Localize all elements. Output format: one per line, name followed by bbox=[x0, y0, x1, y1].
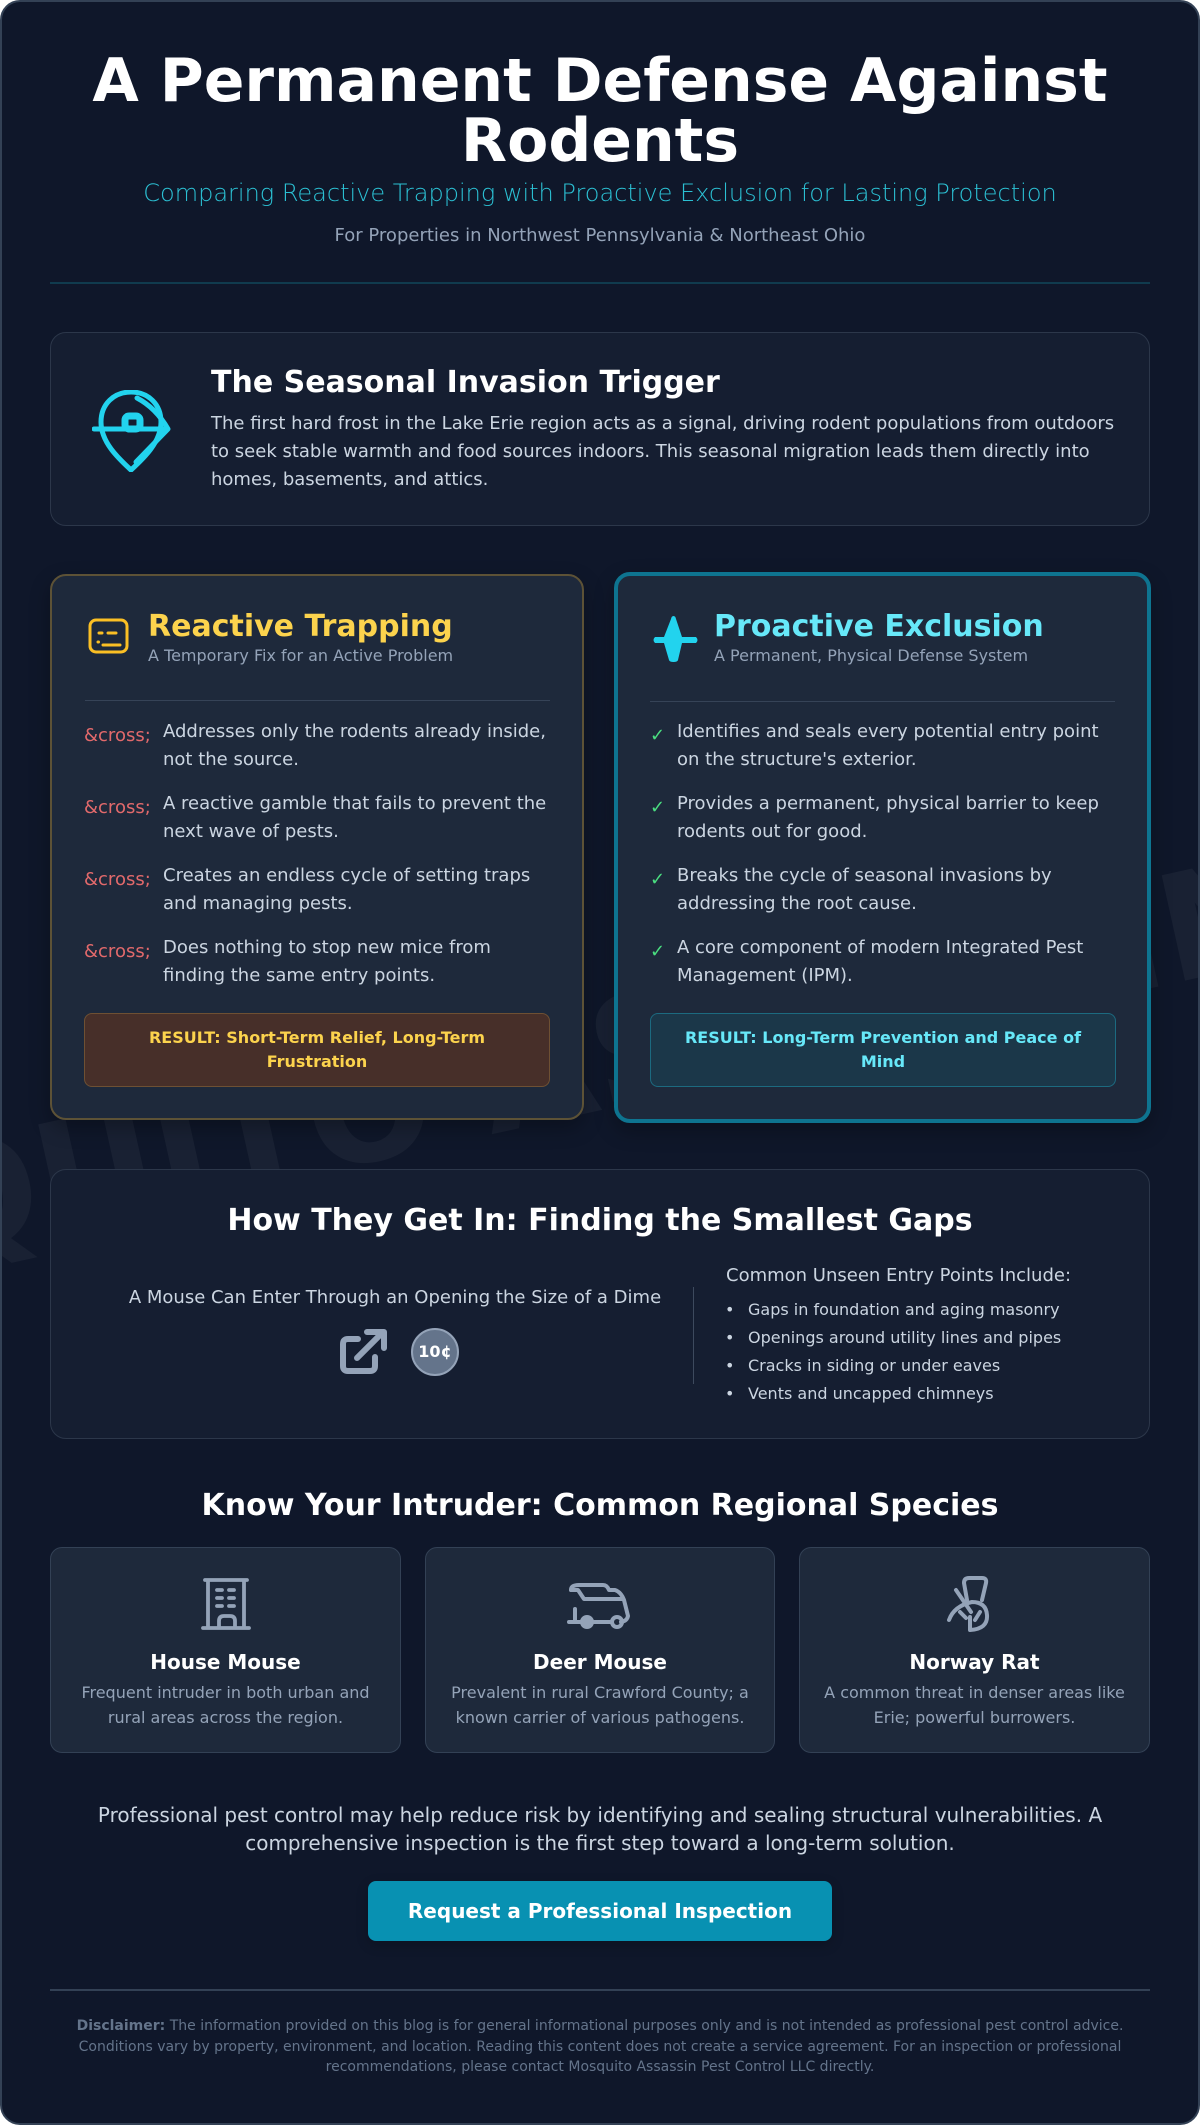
list: reactive drawbacks: and managing pests. bbox=[163, 893, 353, 914]
list: proactive benefits: Breaks the cycle of seasonal invasions by bbox=[677, 865, 1052, 886]
list: reactive drawbacks: &cross; bbox=[84, 941, 151, 962]
body text: to seek stable warmth and food sources indoors. This seasonal migration leads them directly into bbox=[211, 441, 1090, 462]
result box: RESULT: Short-Term Relief, Long-Term bbox=[149, 1028, 485, 1047]
icon: external link bbox=[340, 1329, 387, 1374]
list: proactive benefits: Provides a permanent, physical barrier to keep bbox=[677, 793, 1099, 814]
disclaimer: Disclaimer: The information provided on this blog is for general informational purposes only and is not intended as professional pest control advice. bbox=[77, 2018, 1123, 2034]
button: request inspection: Request a Professional Inspection bbox=[408, 1899, 792, 1923]
list: reactive drawbacks: Creates an endless cycle of setting traps bbox=[163, 865, 530, 886]
list: proactive benefits: Management (IPM). bbox=[677, 965, 853, 986]
panel: how they get in bbox=[50, 1169, 1150, 1439]
list: reactive drawbacks: &cross; bbox=[84, 869, 151, 890]
entry points list: • bbox=[725, 1300, 734, 1319]
panel: seasonal invasion trigger bbox=[50, 332, 1150, 526]
heading: How They Get In: Finding the Smallest Gaps bbox=[227, 1203, 973, 1238]
body text: homes, basements, and attics. bbox=[211, 469, 488, 490]
list: reactive drawbacks: finding the same entry points. bbox=[163, 965, 435, 986]
closing text: comprehensive inspection is the first step toward a long-term solution. bbox=[245, 1831, 955, 1855]
body text bbox=[210, 413, 1114, 490]
subtitle: Comparing Reactive Trapping with Proactive Exclusion for Lasting Protection bbox=[143, 179, 1057, 207]
species description bbox=[451, 1683, 749, 1727]
entry points list: • bbox=[725, 1356, 734, 1375]
list: proactive benefits: A core component of modern Integrated Pest bbox=[677, 937, 1083, 958]
species description: rural areas across the region. bbox=[108, 1708, 343, 1727]
species description: A common threat in denser areas like bbox=[824, 1683, 1125, 1702]
icon: reactive bbox=[88, 618, 128, 654]
entry points list bbox=[725, 1265, 1071, 1403]
species name: Norway Rat bbox=[909, 1650, 1040, 1674]
panel: proactive exclusion bbox=[614, 572, 1151, 1123]
icon: building bbox=[201, 1578, 251, 1630]
disclaimer: recommendations, please contact Mosquito Assassin Pest Control LLC directly. bbox=[326, 2059, 874, 2075]
entry points list: Vents and uncapped chimneys bbox=[748, 1384, 994, 1403]
panel: deer mouse bbox=[425, 1547, 775, 1753]
list: reactive drawbacks: A reactive gamble that fails to prevent the bbox=[163, 793, 546, 814]
body text: The first hard frost in the Lake Erie region acts as a signal, driving rodent populations from outdoors bbox=[211, 413, 1114, 434]
icon: dime bbox=[411, 1328, 459, 1376]
closing text: Professional pest control may help reduce risk by identifying and sealing structural vulnerabilities. A bbox=[98, 1803, 1102, 1827]
species description bbox=[824, 1683, 1125, 1727]
region note: For Properties in Northwest Pennsylvania & Northeast Ohio bbox=[335, 225, 865, 246]
list: reactive drawbacks: Does nothing to stop new mice from bbox=[163, 937, 491, 958]
list: reactive drawbacks: &cross; bbox=[84, 797, 151, 818]
closing text bbox=[98, 1803, 1102, 1855]
entry points list: Gaps in foundation and aging masonry bbox=[748, 1300, 1060, 1319]
icon: location pin bbox=[92, 390, 170, 472]
icon: vehicle bbox=[567, 1583, 630, 1629]
list: proactive benefits bbox=[650, 721, 1099, 986]
species description: known carrier of various pathogens. bbox=[456, 1708, 744, 1727]
subheading: A Permanent, Physical Defense System bbox=[714, 646, 1028, 665]
result box bbox=[650, 1013, 1116, 1087]
list: proactive benefits: ✓ bbox=[650, 725, 665, 746]
species description: Frequent intruder in both urban and bbox=[81, 1683, 370, 1702]
species name: House Mouse bbox=[150, 1650, 301, 1674]
panel: norway rat bbox=[799, 1547, 1150, 1753]
icon: dime: 10¢ bbox=[418, 1342, 452, 1361]
list: reactive drawbacks bbox=[84, 721, 546, 986]
disclaimer bbox=[77, 2018, 1123, 2075]
result box: RESULT: Long-Term Prevention and Peace of bbox=[685, 1028, 1081, 1047]
species name: Deer Mouse bbox=[533, 1650, 667, 1674]
list: proactive benefits: ✓ bbox=[650, 797, 665, 818]
subheading: A Temporary Fix for an Active Problem bbox=[148, 646, 453, 665]
list: proactive benefits: addressing the root cause. bbox=[677, 893, 917, 914]
result box: Frustration bbox=[267, 1052, 367, 1071]
species description bbox=[81, 1683, 370, 1727]
list: reactive drawbacks: Addresses only the rodents already inside, bbox=[163, 721, 546, 742]
entry points list: Common Unseen Entry Points Include: bbox=[726, 1265, 1071, 1286]
list: reactive drawbacks: not the source. bbox=[163, 749, 299, 770]
panel: reactive trapping bbox=[50, 574, 584, 1120]
species description: Prevalent in rural Crawford County; a bbox=[451, 1683, 749, 1702]
heading: The Seasonal Invasion Trigger bbox=[211, 365, 720, 400]
list: proactive benefits: ✓ bbox=[650, 869, 665, 890]
heading: Proactive Exclusion bbox=[714, 609, 1044, 644]
button: request inspection bbox=[368, 1881, 832, 1941]
title: Rodents bbox=[461, 106, 739, 176]
list: reactive drawbacks: &cross; bbox=[84, 725, 151, 746]
species description: Erie; powerful burrowers. bbox=[874, 1708, 1075, 1727]
dime comparison text: A Mouse Can Enter Through an Opening the Size of a Dime bbox=[129, 1287, 661, 1308]
list: proactive benefits: on the structure's exterior. bbox=[677, 749, 917, 770]
icon: rat bbox=[947, 1576, 990, 1632]
disclaimer: Conditions vary by property, environment, and location. Reading this content does not create a service agreement. For an inspection or professional bbox=[79, 2038, 1121, 2054]
list: reactive drawbacks: next wave of pests. bbox=[163, 821, 339, 842]
list: proactive benefits: rodents out for good. bbox=[677, 821, 867, 842]
list: proactive benefits: ✓ bbox=[650, 941, 665, 962]
icon: proactive bbox=[654, 616, 698, 662]
section heading: species: Know Your Intruder: Common Regional Species bbox=[201, 1488, 999, 1523]
entry points list: Cracks in siding or under eaves bbox=[748, 1356, 1000, 1375]
result box: Mind bbox=[861, 1052, 905, 1071]
panel: house mouse bbox=[50, 1547, 401, 1753]
entry points list: • bbox=[725, 1384, 734, 1403]
title: A Permanent Defense Against bbox=[92, 46, 1108, 116]
list: proactive benefits: Identifies and seals every potential entry point bbox=[677, 721, 1099, 742]
result box bbox=[84, 1013, 550, 1087]
entry points list: • bbox=[725, 1328, 734, 1347]
title bbox=[92, 46, 1108, 176]
heading: Reactive Trapping bbox=[148, 609, 453, 644]
entry points list: Openings around utility lines and pipes bbox=[748, 1328, 1061, 1347]
